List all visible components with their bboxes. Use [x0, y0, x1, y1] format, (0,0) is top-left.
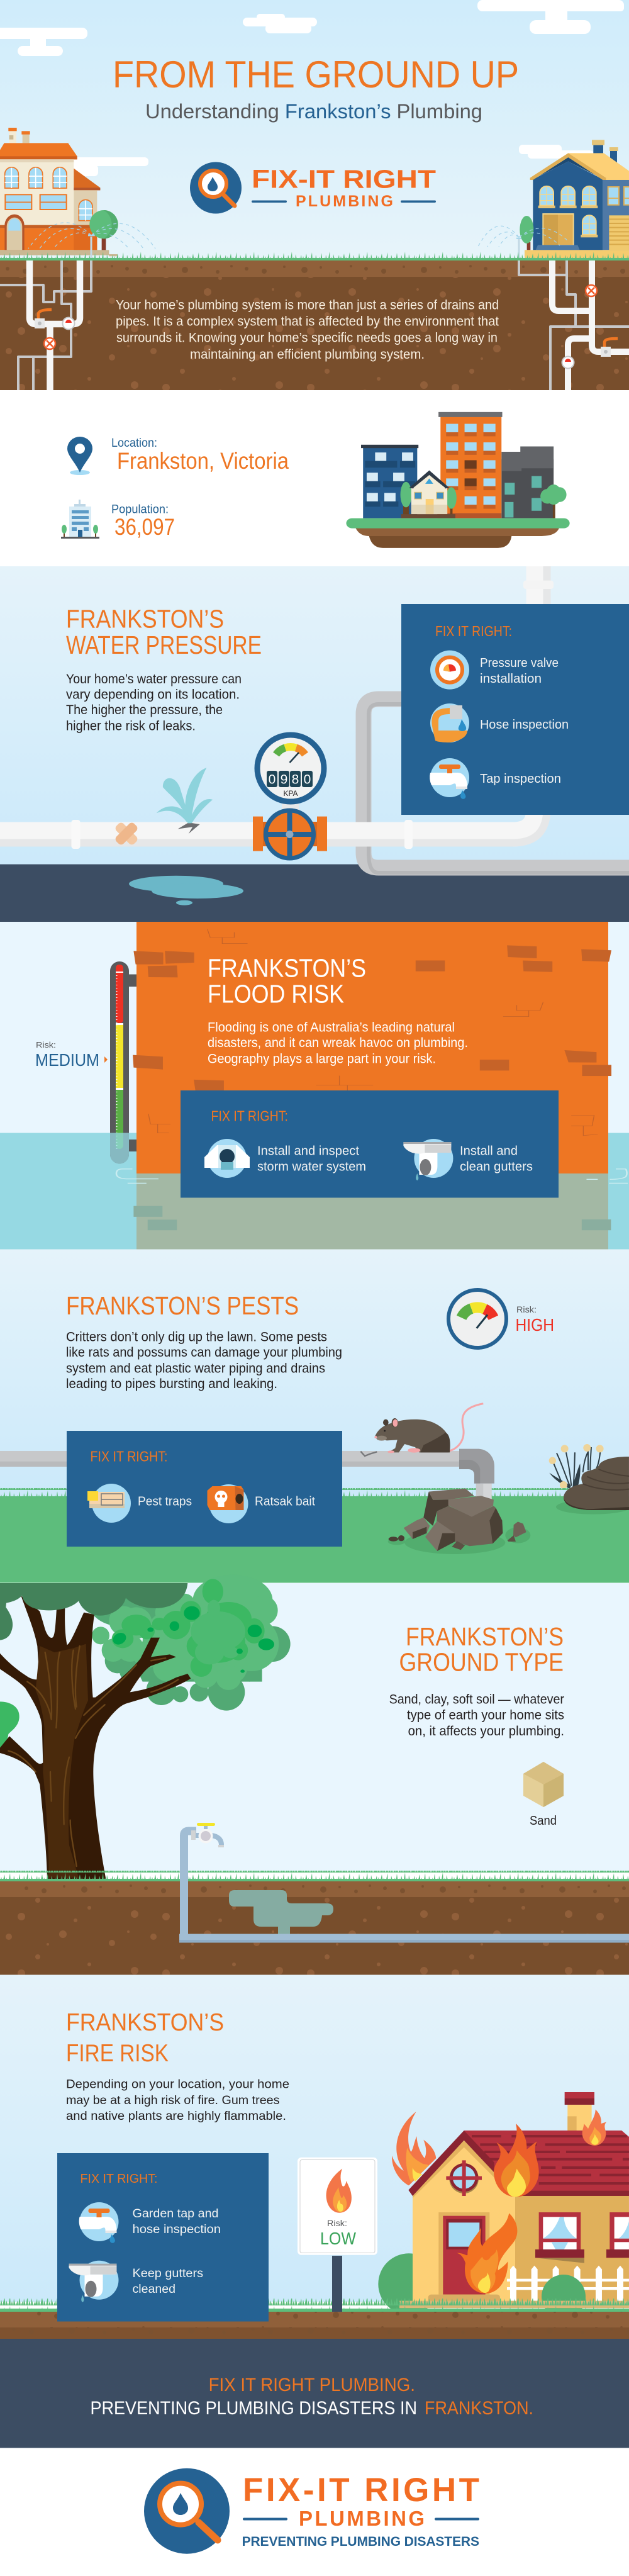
icon: gutter	[69, 2261, 118, 2302]
label: Install and	[460, 1145, 518, 1158]
label	[132, 2207, 221, 2236]
pressure meter: 9	[281, 773, 287, 787]
body text: Critters don’t only dig up the lawn. Some pests	[66, 1330, 327, 1344]
flame: door	[457, 2213, 517, 2293]
section: fire risk	[0, 1975, 629, 2339]
icon: storm water drain	[204, 1139, 250, 1178]
lawn	[0, 1496, 629, 1583]
section: flood risk	[0, 922, 629, 1250]
heading: GROUND TYPE	[399, 1647, 564, 1676]
bricks	[133, 929, 611, 1230]
label: clean gutters	[460, 1160, 533, 1174]
trunk	[0, 1596, 191, 1879]
icon: location pin	[67, 437, 92, 475]
panel: fix it right: FIX IT RIGHT:	[211, 1108, 288, 1124]
flood water	[0, 1133, 629, 1250]
grass	[0, 2299, 629, 2309]
risk sign	[298, 2158, 377, 2312]
sky	[0, 1583, 629, 1871]
flame	[326, 2169, 352, 2213]
tap	[191, 1823, 224, 1847]
floor	[0, 865, 629, 922]
clouds	[0, 0, 624, 176]
left bush	[378, 2253, 440, 2315]
body text	[66, 672, 242, 733]
panel: fix it right: FIX IT RIGHT:	[435, 623, 512, 639]
footer banner	[0, 2339, 629, 2448]
body text: type of earth your home sits	[407, 1708, 564, 1723]
canopy	[0, 1583, 187, 1640]
left house	[0, 128, 118, 256]
heading: FRANKSTON’S	[406, 1622, 564, 1651]
label: Keep gutters	[132, 2267, 203, 2280]
risk label: Risk:	[327, 2218, 347, 2228]
flame: chimney	[582, 2110, 606, 2146]
city illustration	[346, 412, 570, 548]
icon: hose	[430, 703, 469, 742]
bandage	[109, 816, 144, 851]
sprinkler risers	[91, 237, 519, 260]
label: Pressure valve	[480, 656, 559, 670]
panel: fix it right	[401, 604, 629, 815]
location label: Location:	[111, 437, 157, 450]
soil layers	[0, 260, 629, 277]
bright canopy	[112, 1579, 265, 1677]
body text: Sand, clay, soft soil — whatever	[389, 1693, 564, 1707]
white background	[0, 390, 629, 566]
brick wall	[136, 922, 608, 1173]
panel: fix it right: FIX IT RIGHT:	[81, 2172, 157, 2186]
title: FROM THE GROUND UP	[113, 53, 519, 96]
label: Ratsak bait	[255, 1495, 315, 1509]
body text: higher the risk of leaks.	[66, 719, 196, 733]
grey pest pipe	[0, 1449, 494, 1499]
risk label: Risk:	[36, 1040, 56, 1050]
mound	[556, 1457, 629, 1515]
risk value: LOW	[320, 2229, 357, 2248]
body text: Geography plays a large part in your risk.	[208, 1052, 436, 1067]
label: Hose inspection	[480, 718, 569, 732]
panel: fix it right	[181, 1090, 559, 1198]
banner line 2 accent: FRANKSTON.	[425, 2398, 533, 2419]
heading: FRANKSTON’S PESTS	[66, 1291, 299, 1320]
heading	[208, 954, 366, 1009]
rock	[388, 1489, 530, 1554]
sky	[0, 1250, 629, 1498]
valve	[253, 810, 327, 858]
label: hose inspection	[132, 2223, 221, 2236]
population label: Population:	[111, 503, 169, 516]
pressure meter: 0	[269, 773, 276, 787]
body text: vary depending on its location.	[66, 688, 240, 702]
sand label: Sand	[530, 1814, 557, 1828]
sky	[0, 922, 629, 1133]
puddle	[129, 876, 243, 905]
section: water pressure	[0, 566, 629, 922]
body text: leading to pipes bursting and leaking.	[66, 1377, 277, 1391]
heading: FRANKSTON’S	[66, 605, 224, 634]
flame: roof centre	[494, 2124, 539, 2197]
intro paragraph: pipes. It is a complex system that is affected by the environment that	[116, 315, 499, 328]
population value: 36,097	[114, 514, 175, 540]
tree	[0, 1575, 291, 1879]
grass in front of trunk	[38, 1871, 113, 1879]
pipe fittings left	[35, 310, 74, 349]
soil layers	[0, 2312, 629, 2327]
lower left foliage	[0, 1701, 19, 1748]
flame: roof left	[392, 2112, 436, 2185]
label: storm water system	[257, 1160, 366, 1174]
section: ground type	[0, 1575, 629, 1975]
footer logo: PLUMBING	[299, 2507, 425, 2530]
heading	[399, 1622, 564, 1676]
grey pipe	[364, 699, 629, 873]
body text: Flooding is one of Australia’s leading natural	[208, 1020, 455, 1034]
label: cleaned	[132, 2283, 175, 2296]
risk label: Risk:	[516, 1304, 537, 1314]
icon: tap	[79, 2202, 118, 2243]
logo: FIX-IT RIGHT	[252, 165, 436, 194]
heading: WATER PRESSURE	[66, 630, 262, 659]
pipe fittings right	[562, 285, 618, 369]
footer logo	[0, 2448, 629, 2576]
body text: The higher the pressure, the	[66, 703, 223, 717]
sky background	[0, 0, 629, 260]
section: location facts	[0, 390, 629, 566]
mid canopy	[191, 1600, 245, 1664]
mound plants	[549, 1444, 604, 1489]
trunk shading	[36, 1644, 88, 1878]
grass	[0, 1871, 629, 1879]
body text	[66, 2078, 289, 2123]
house	[378, 2092, 629, 2319]
subtitle: Understanding Frankston’s Plumbing	[145, 100, 482, 123]
body text: disasters, and it can wreak havoc on plumbing.	[208, 1036, 468, 1050]
icon: gutter	[403, 1139, 453, 1180]
panel: fix it right: FIX IT RIGHT:	[91, 1448, 167, 1465]
heading	[66, 605, 262, 659]
banner line 1: FIX IT RIGHT PLUMBING.	[209, 2375, 415, 2395]
heading: FIRE RISK	[66, 2040, 169, 2067]
section: header with houses and plumbing	[0, 0, 629, 390]
soil layers	[0, 1881, 629, 1897]
icon: sand cube	[523, 1762, 564, 1807]
icon: rat bait	[208, 1484, 248, 1523]
location value: Frankston, Victoria	[117, 448, 289, 474]
sky background	[0, 566, 629, 865]
section: pests	[0, 1250, 629, 1583]
underground pipes right	[519, 260, 629, 390]
body text: Depending on your location, your home	[66, 2078, 289, 2092]
right house	[516, 140, 629, 258]
sky	[0, 1975, 629, 2302]
pressure meter: KPA	[283, 789, 298, 798]
pressure meter	[257, 735, 324, 818]
intro paragraph: Your home’s plumbing system is more than just a series of drains and	[116, 298, 499, 312]
label	[460, 1145, 533, 1174]
banner line 2: PREVENTING PLUMBING DISASTERS IN	[91, 2398, 417, 2419]
intro paragraph: maintaining an efficient plumbing system.	[190, 347, 425, 362]
icon: pest trap	[87, 1484, 131, 1523]
body text: on, it affects your plumbing.	[408, 1724, 564, 1739]
submerged wall	[136, 1173, 608, 1250]
label	[132, 2267, 203, 2296]
label: Tap inspection	[480, 772, 561, 786]
label	[480, 656, 559, 686]
pressure meter: 0	[304, 773, 311, 787]
pressure meter: 8	[292, 773, 299, 787]
intro paragraph: surrounds it. Knowing your home’s specific needs goes a long way in	[116, 331, 498, 345]
label: Garden tap and	[132, 2207, 219, 2220]
underground pipes left	[0, 260, 91, 390]
grass strip	[0, 252, 629, 259]
icon: pressure valve	[430, 651, 469, 690]
heading: FRANKSTON’S	[208, 954, 366, 983]
body text	[66, 1330, 342, 1391]
logo: PLUMBING	[296, 193, 393, 210]
label: Pest traps	[138, 1495, 192, 1509]
body text	[208, 1020, 468, 1067]
flames	[392, 2110, 606, 2293]
heading	[66, 2009, 224, 2067]
rear canopy	[90, 1585, 291, 1711]
body text: like rats and possums can damage your plumbing	[66, 1345, 342, 1360]
marker arrow	[104, 1056, 108, 1063]
leaking pipe	[179, 1831, 629, 1943]
risk value: HIGH	[516, 1315, 554, 1335]
icon: apartment tower	[61, 500, 99, 539]
footer logo: PREVENTING PLUMBING DISASTERS	[242, 2534, 479, 2549]
sprinkler arcs	[28, 223, 569, 249]
label: Install and inspect	[257, 1145, 359, 1158]
label: installation	[480, 672, 542, 686]
heading: FLOOD RISK	[208, 980, 344, 1009]
body text: Your home’s water pressure can	[66, 672, 242, 686]
intro paragraph	[116, 298, 499, 362]
body text	[389, 1693, 564, 1739]
body text: system and eat plastic water piping and drains	[66, 1361, 325, 1375]
risk gauge	[448, 1290, 506, 1348]
water ripples	[116, 1169, 628, 1183]
panel: fix it right	[57, 2153, 269, 2322]
heading: FRANKSTON’S	[66, 2009, 224, 2036]
white pipe	[0, 566, 554, 849]
body text: and native plants are highly flammable.	[66, 2110, 286, 2123]
body text: may be at a high risk of fire. Gum trees	[66, 2094, 279, 2107]
water spray and crack	[157, 768, 213, 834]
panel: fix it right	[67, 1431, 342, 1547]
footer logo: FIX-IT RIGHT	[243, 2472, 479, 2509]
logo	[190, 162, 436, 214]
risk value: MEDIUM	[35, 1050, 99, 1070]
leaf spots	[111, 1606, 274, 1673]
label	[257, 1145, 366, 1174]
flood gauge	[110, 961, 136, 1163]
icon: tap	[430, 758, 469, 799]
light canopy	[92, 1575, 279, 1690]
rat	[360, 1404, 483, 1456]
